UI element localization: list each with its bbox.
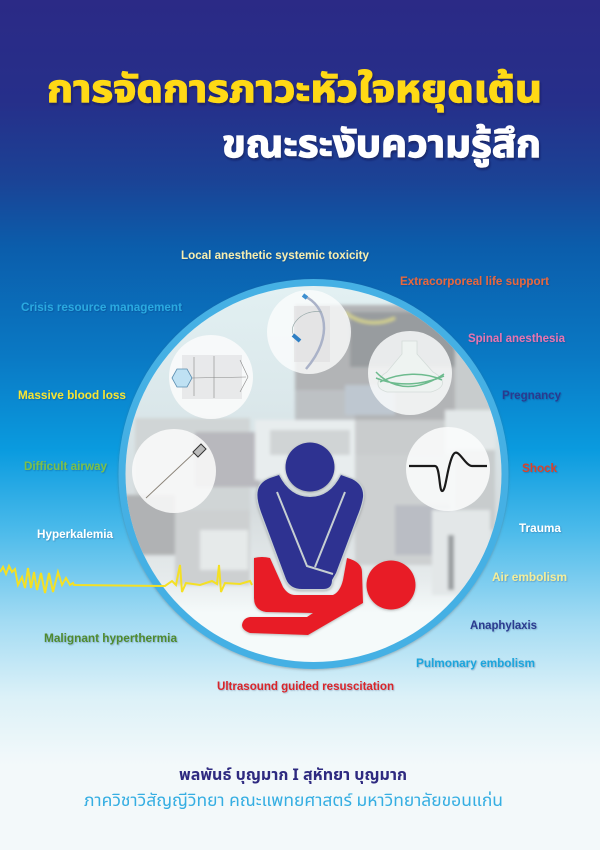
patient: red torso bbox=[242, 557, 363, 635]
label: Local anesthetic systemic toxicity: Local anesthetic systemic toxicity bbox=[181, 248, 369, 262]
title: ขณะระงับความรู้สึก bbox=[222, 118, 541, 175]
label: Massive blood loss: Massive blood loss bbox=[18, 388, 126, 402]
small circle: ECG waveform bbox=[406, 427, 490, 511]
rescuer: blue head bbox=[286, 442, 334, 492]
label: Shock: Shock bbox=[522, 461, 557, 475]
label: Extracorporeal life support: Extracorporeal life support bbox=[400, 274, 549, 288]
label: Hyperkalemia: Hyperkalemia bbox=[37, 527, 113, 541]
rescuer: blue body bbox=[257, 475, 363, 589]
patient: red head bbox=[366, 560, 416, 610]
small circle: molecule diagram bbox=[169, 335, 253, 419]
label: Air embolism: Air embolism bbox=[492, 570, 567, 584]
label: Pulmonary embolism: Pulmonary embolism bbox=[416, 656, 535, 670]
small circle: needle bbox=[132, 429, 216, 513]
label ring bbox=[18, 248, 567, 693]
label: Ultrasound guided resuscitation: Ultrasound guided resuscitation bbox=[217, 679, 394, 693]
label: Anaphylaxis: Anaphylaxis bbox=[470, 618, 537, 632]
central photo circle bbox=[118, 279, 508, 669]
label: Spinal anesthesia: Spinal anesthesia bbox=[468, 331, 565, 345]
ECG line bbox=[0, 565, 252, 593]
label: Crisis resource management: Crisis resource management bbox=[21, 300, 182, 314]
affiliation: ภาควิชาวิสัญญีวิทยา คณะแพทยศาสตร์ มหาวิทยาลัยขอนแก่น bbox=[84, 788, 503, 814]
authors: พลพันธ์ บุญมาก I สุหัทยา บุญมาก bbox=[179, 764, 407, 788]
label: Difficult airway: Difficult airway bbox=[24, 459, 107, 473]
title bbox=[47, 63, 542, 175]
label: Trauma: Trauma bbox=[519, 521, 561, 535]
rescuer: arm lines bbox=[277, 492, 345, 574]
small circle: endotracheal tube bbox=[267, 290, 351, 374]
label: Pregnancy: Pregnancy bbox=[502, 388, 561, 402]
title: การจัดการภาวะหัวใจหยุดเต้น bbox=[47, 63, 542, 120]
label: Malignant hyperthermia: Malignant hyperthermia bbox=[44, 631, 177, 645]
small circle: anesthesia mask bbox=[368, 331, 452, 415]
CPR figure bbox=[242, 442, 416, 635]
